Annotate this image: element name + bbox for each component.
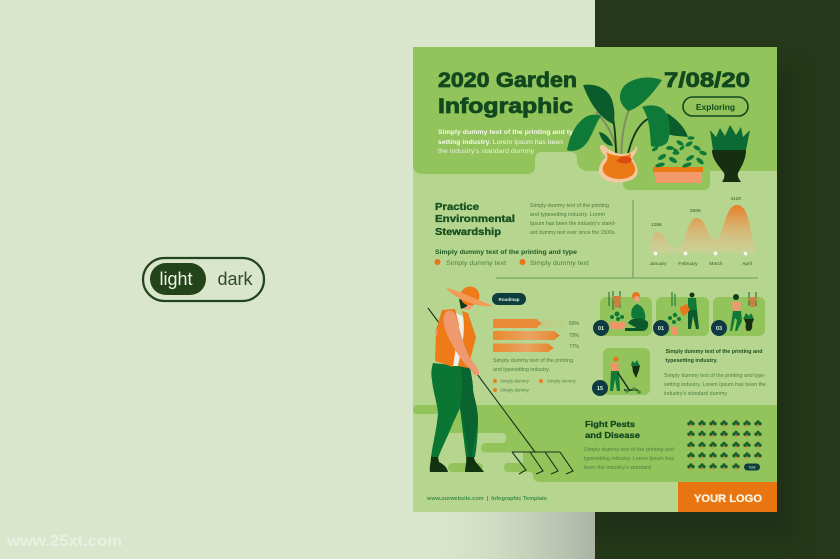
- number badges: [592, 320, 727, 396]
- watermark: www.25xt.com: [6, 533, 122, 550]
- paragraph: [530, 203, 616, 236]
- paragraph: Ipsum has been the industry's stand-: [530, 221, 616, 227]
- paragraph: Simply dummy text of the printing: [530, 203, 609, 209]
- title: [438, 69, 577, 118]
- heading: fight pests and disease: and Disease: [585, 430, 640, 440]
- heading: fight pests and disease: [585, 419, 640, 440]
- intro text: setting industry. Lorem Ipsum has been: [438, 140, 563, 146]
- area chart: 256K: [690, 208, 702, 214]
- background dark panel: [595, 0, 840, 559]
- area chart: March: [709, 261, 723, 267]
- area chart: February: [678, 261, 698, 267]
- area chart: 128K: [651, 222, 663, 228]
- tile 3: gardener with hanging plant: [713, 292, 765, 336]
- icon: trough plant: [651, 136, 707, 183]
- side text block: setting industry. Lorem Ipsum has been the: [664, 382, 766, 388]
- roadmap pill: Roadmap: [499, 297, 520, 302]
- icon: dark vase with spiky plant: [710, 125, 750, 182]
- intro text: [438, 130, 582, 155]
- fight pests text: typesetting industry. Lorem Ipsum has: [584, 456, 675, 462]
- fight pests text: been the industry's standard: [584, 465, 651, 471]
- date: 7/08/20: [664, 69, 750, 92]
- tile 2: gardener watering: [656, 292, 709, 336]
- side text block: [664, 349, 766, 397]
- cast shadow on light background: [440, 512, 595, 559]
- heading: practice environmental stewardship: Practice: [435, 202, 479, 213]
- logo block: YOUR LOGO: [694, 493, 762, 505]
- area chart: January: [649, 261, 667, 267]
- side text block: typesetting industry.: [666, 358, 718, 364]
- heading: fight pests and disease: Fight Pests: [585, 419, 635, 429]
- side text block: Simply dummy text of the printing and type-: [664, 373, 766, 379]
- progress bars: [493, 319, 580, 352]
- side text block: industry's standard dummy: [664, 391, 727, 397]
- theme toggle: light: [159, 269, 193, 289]
- number badges: 01: [598, 326, 604, 332]
- header green shape: [413, 47, 777, 190]
- fight pests text: [584, 447, 675, 471]
- side text block: Simply dummy text of the printing and: [666, 349, 762, 355]
- background left: [0, 0, 595, 559]
- roadmap text: Simply dummy text of the printing: [493, 358, 573, 364]
- pictogram grid: [687, 420, 762, 470]
- roadmap text: and typesetting industry.: [493, 367, 550, 373]
- poster card: [413, 47, 777, 512]
- area chart: [648, 196, 757, 267]
- bottom green band: [413, 405, 777, 482]
- title: Infographic: [438, 95, 573, 118]
- area chart: 412K: [730, 196, 742, 202]
- number badges: 01: [658, 326, 664, 332]
- tile 4: gardener raking: [603, 348, 650, 395]
- roadmap text: Simply dummy: [547, 378, 577, 384]
- paragraph: ard dummy text ever since the 1500s.: [530, 230, 616, 236]
- intro text: the industry's standard dummy: [438, 149, 534, 155]
- icon: large potted plant: [567, 78, 688, 182]
- progress bars: 77%: [569, 344, 580, 350]
- progress bars: 79%: [569, 333, 580, 339]
- exploring pill: Exploring: [696, 102, 735, 112]
- subheading and bullets: Simply dummy text: [530, 260, 589, 267]
- logo block: [678, 482, 777, 512]
- title: 2020 Garden: [438, 69, 577, 92]
- heading: practice environmental stewardship: Stewardship: [435, 227, 501, 238]
- progress bars: 60%: [569, 321, 580, 327]
- subheading and bullets: [434, 249, 589, 267]
- roadmap text: Simply dummy: [500, 388, 530, 392]
- subheading and bullets: Simply dummy text of the printing and type: [435, 249, 577, 256]
- fight pests text: Simply dummy text of the printing and: [584, 447, 674, 453]
- intro text: Simply dummy text of the printing and type: [438, 130, 582, 136]
- tile 1: gardener crouching: [600, 291, 652, 336]
- illustration: gardener with rake: [428, 286, 573, 474]
- footer text: www.ourwebsite.com | Infographic Template: [426, 496, 547, 502]
- heading: practice environmental stewardship: Environmental: [435, 214, 515, 225]
- roadmap pill: [492, 293, 526, 305]
- roadmap text: Simply dummy: [500, 378, 530, 384]
- ground pill: [448, 463, 483, 472]
- area chart: April: [742, 261, 752, 267]
- theme toggle: dark: [217, 269, 254, 289]
- paragraph: and typesetting industry. Lorem: [530, 212, 605, 218]
- pictogram grid: Total: [749, 466, 756, 470]
- roadmap text: [493, 358, 577, 392]
- theme toggle: [143, 258, 264, 301]
- card shadow: [595, 76, 788, 534]
- number badges: 03: [716, 326, 722, 332]
- number badges: 15: [597, 386, 603, 392]
- subheading and bullets: Simply dummy text: [446, 260, 506, 267]
- exploring pill: [683, 97, 748, 116]
- heading: practice environmental stewardship: [435, 202, 515, 238]
